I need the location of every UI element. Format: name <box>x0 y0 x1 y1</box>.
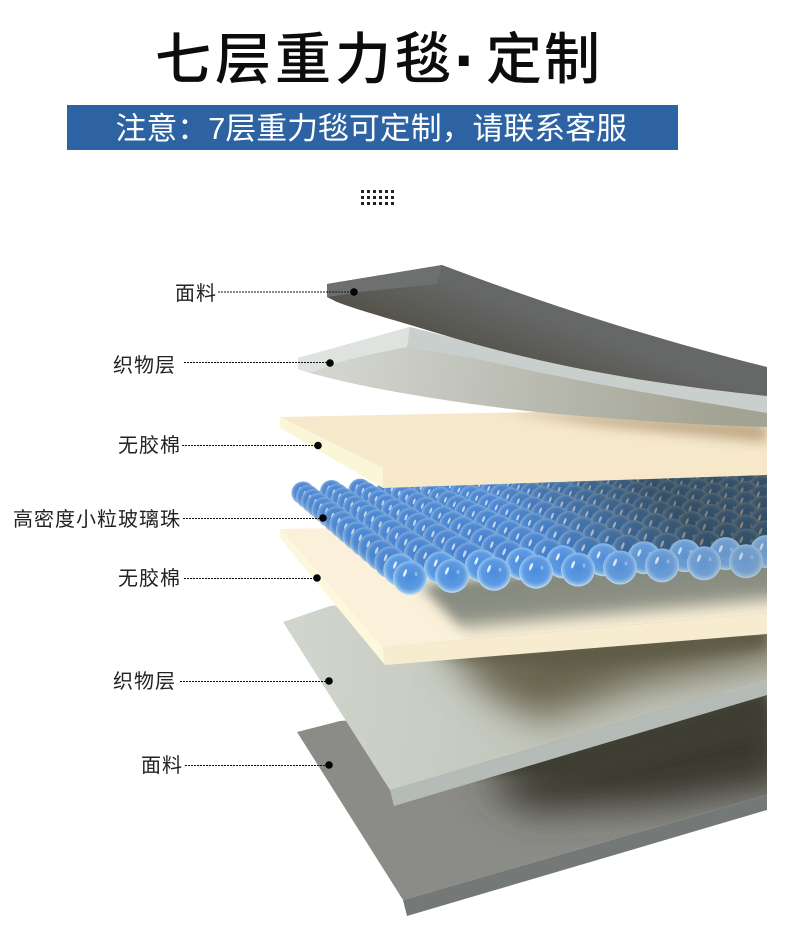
label: 织物层 lower <box>113 670 333 693</box>
notice banner <box>67 105 678 150</box>
label: 面料 top: 面料 <box>175 282 217 305</box>
layer 6: bottom woven layer <box>283 604 767 806</box>
icon: dot grid ornament <box>361 190 394 205</box>
layer 5: lower cotton <box>280 520 790 665</box>
layer 2: upper woven layer <box>298 327 767 427</box>
label: 无胶棉 upper <box>118 434 322 457</box>
layer 3: upper cotton <box>280 410 767 488</box>
title: 定制 <box>486 28 600 91</box>
label: 面料 bottom <box>141 754 333 777</box>
label: 织物层 upper <box>113 354 334 377</box>
layer 1: top fabric <box>327 265 767 396</box>
label: 高密度小粒玻璃珠 <box>13 508 327 531</box>
title: · <box>454 21 477 99</box>
label: 无胶棉 lower <box>118 567 321 590</box>
layer 7: bottom fabric <box>297 690 790 916</box>
layer 4: glass beads <box>291 475 767 595</box>
label: 高密度小粒玻璃珠: 高密度小粒玻璃珠 <box>13 508 181 531</box>
label: 织物层 upper: 织物层 <box>113 354 176 377</box>
notice banner: 注意：7层重力毯可定制，请联系客服 <box>116 111 627 146</box>
label: 无胶棉 upper: 无胶棉 <box>118 434 181 457</box>
title: 七层重力毯 <box>155 28 451 91</box>
label: 无胶棉 lower: 无胶棉 <box>118 567 181 590</box>
label: 织物层 lower: 织物层 <box>113 670 176 693</box>
label: 面料 bottom: 面料 <box>141 754 183 777</box>
label: 面料 top <box>175 282 358 305</box>
blanket layer stack illustration <box>280 265 790 916</box>
